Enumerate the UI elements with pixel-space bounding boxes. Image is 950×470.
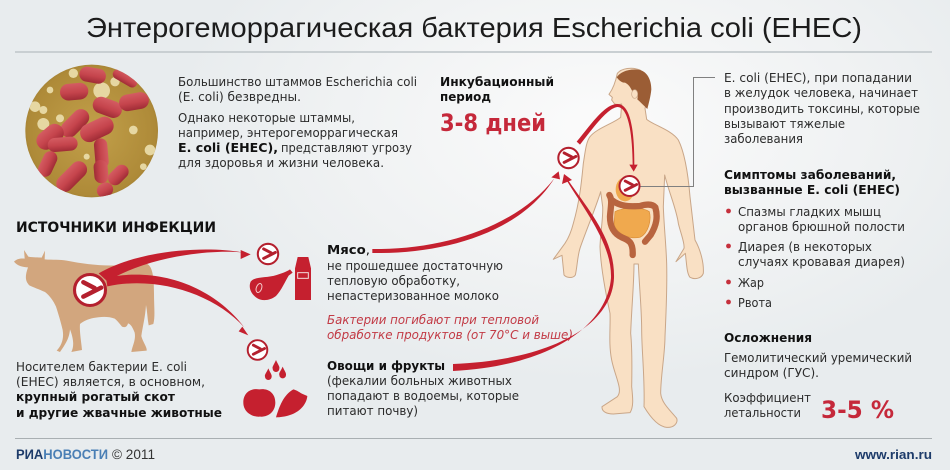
- text: intro about E. coli strains: Однако некоторые штаммы,: [178, 111, 355, 125]
- text: toxins: [724, 71, 920, 146]
- text: toxins: вызывают тяжелые: [724, 117, 845, 131]
- fatality rate: летальности: [724, 406, 801, 420]
- website: www.rian.ru: [854, 447, 932, 462]
- note: heat kills bacteria: обработке продуктов (от 70°C и выше): [327, 328, 573, 342]
- complications: Гемолитический уремический: [724, 351, 912, 365]
- text: cattle as carriers: и другие жвачные животные: [16, 406, 222, 420]
- text: meat: не прошедшее достаточную: [327, 259, 503, 273]
- text: cattle as carriers: Носителем бактерии E. coli: [16, 360, 187, 374]
- text: vegetables and fruits: Овощи и фрукты: [327, 359, 445, 373]
- symptoms list: вызванные E. coli (EHEC): [724, 183, 900, 197]
- logo: RIA Novosti: РИАНОВОСТИ: [16, 447, 108, 462]
- note: heat kills bacteria: Бактерии погибают при тепловой: [327, 313, 539, 327]
- text: cattle as carriers: (EHEC) является, в основном,: [16, 375, 205, 389]
- heading: sources of infection: ИСТОЧНИКИ ИНФЕКЦИИ: [16, 220, 216, 236]
- hair: [617, 69, 651, 109]
- text: intro about E. coli strains: E. coli (EHEC),: [178, 141, 278, 155]
- complications: [724, 331, 912, 380]
- text: vegetables and fruits: питают почву): [327, 404, 418, 418]
- text: toxins: E. coli (EHEC), при попадании: [724, 71, 912, 85]
- callout line from stomach to text: [640, 78, 715, 186]
- text: intro about E. coli strains: например, энтерогеморрагическая: [178, 126, 398, 140]
- ear: [632, 90, 638, 98]
- complications: синдром (ГУС).: [724, 366, 819, 380]
- text: meat: Мясо ,: [327, 243, 370, 257]
- icon: bacteria above vegetables: [248, 340, 267, 360]
- arrows from cow to food: [99, 250, 251, 335]
- arrow: vegetables to body: [453, 174, 614, 371]
- incubation period: Инкубационный: [440, 75, 554, 89]
- incubation period: период: [440, 90, 491, 104]
- symptoms list: случаях кровавая диарея): [738, 255, 905, 269]
- incubation period: 3-8 дней: [440, 109, 546, 137]
- text: toxins: заболевания: [724, 132, 803, 146]
- logo: RIA Novosti: © 2011: [112, 447, 155, 462]
- text: intro about E. coli strains: для здоровья и жизни человека.: [178, 156, 384, 170]
- text: cattle as carriers: крупный рогатый скот: [16, 390, 175, 404]
- cow illustration: [14, 250, 154, 352]
- stomach: [616, 177, 634, 201]
- text: meat: тепловую обработку,: [327, 274, 460, 288]
- text: vegetables and fruits: (фекалии больных животных: [327, 374, 512, 388]
- text: meat: непастеризованное молоко: [327, 289, 499, 303]
- text: vegetables and fruits: попадают в водоемы, которые: [327, 389, 519, 403]
- icon: bacteria in cow: [74, 274, 106, 306]
- photo: E. coli bacteria under microscope: [25, 65, 158, 200]
- icon: bacteria in stomach: [620, 176, 640, 196]
- symptoms list: Жар: [738, 276, 764, 290]
- text: intro about E. coli strains: (E. coli) безвредны.: [178, 90, 301, 104]
- logo: RIA Novosti: [16, 447, 155, 462]
- icon: ham and milk carton: [250, 257, 311, 300]
- complications: Осложнения: [724, 331, 812, 345]
- symptoms list: органов брюшной полости: [738, 220, 905, 234]
- text: intro about E. coli strains: представляют угрозу: [281, 141, 412, 155]
- arrow: mouth to stomach: [577, 104, 638, 172]
- fatality rate: Коэффициент: [724, 391, 811, 405]
- symptoms list: Спазмы гладких мышц: [738, 205, 881, 219]
- fatality rate: 3-5 %: [821, 396, 894, 424]
- large intestine: [609, 195, 657, 255]
- icon: bacteria at body entry: [558, 148, 579, 168]
- symptoms list: Симптомы заболеваний,: [724, 168, 896, 182]
- symptoms list: Рвота: [738, 296, 772, 310]
- icon: bacteria above meat: [258, 244, 278, 264]
- fatality rate: [724, 391, 894, 424]
- arrow: meat to body: [372, 171, 560, 253]
- text: toxins: производить токсины, которые: [724, 102, 920, 116]
- text: meat: [327, 243, 503, 303]
- icon: drops, apple and pepper: [243, 360, 307, 417]
- text: intro about E. coli strains: [178, 75, 417, 170]
- note: heat kills bacteria: [327, 313, 573, 342]
- text: cattle as carriers: [16, 360, 222, 420]
- symptoms list: [724, 168, 905, 310]
- incubation period: [440, 75, 554, 137]
- text: intro about E. coli strains: Большинство штаммов Escherichia coli: [178, 75, 417, 89]
- small intestine: [614, 208, 650, 238]
- symptoms list: Диарея (в некоторых: [738, 240, 872, 254]
- text: vegetables and fruits: [327, 359, 519, 418]
- text: toxins: в желудок человека, начинает: [724, 86, 918, 100]
- title: Энтерогеморрагическая бактерия Escherichia coli (EHEC): [86, 12, 862, 43]
- human body illustration: [553, 68, 703, 427]
